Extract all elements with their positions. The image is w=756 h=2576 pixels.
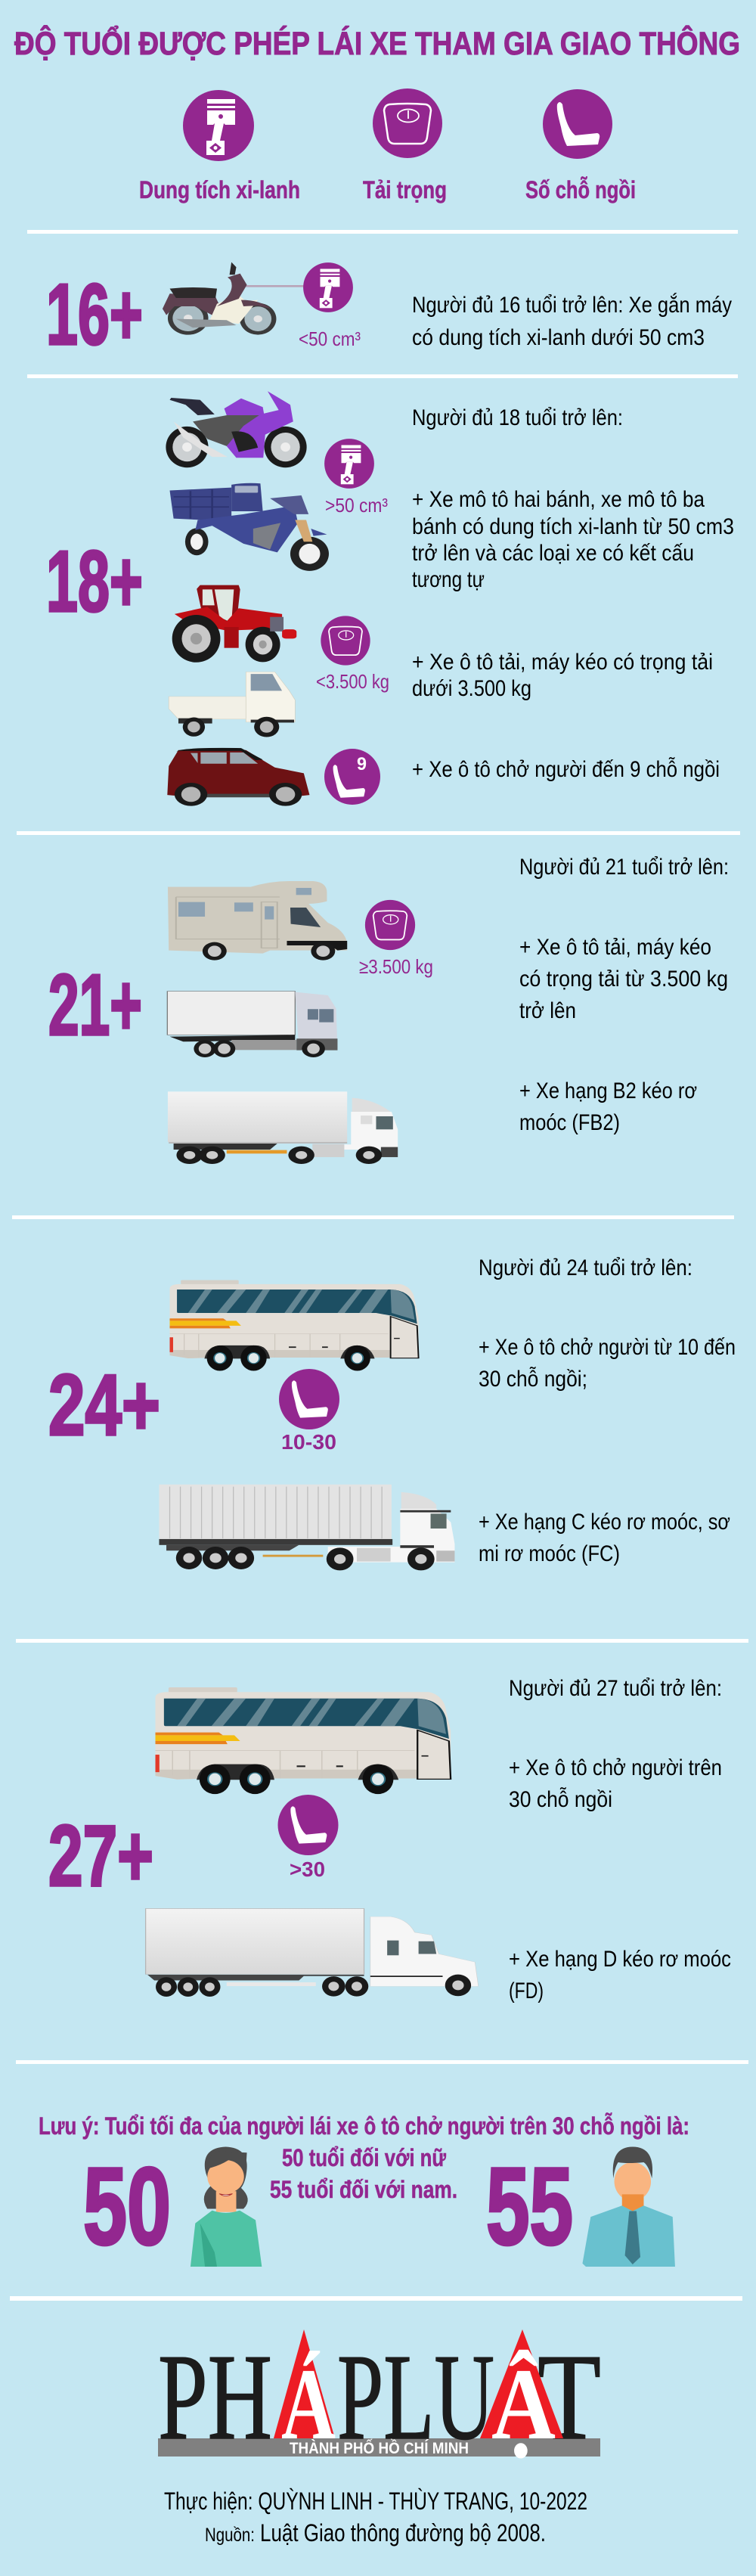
icon: sport motorcycle [166,391,307,467]
text: age 24 rules [479,1255,736,1566]
text: age 18 rules: tương tự [412,567,485,592]
age number 16+: 16+ [46,267,143,363]
icon: seat legend [543,89,612,159]
icon: large coach bus [156,1687,451,1794]
text: age 18 rules [412,405,734,782]
text: age 21 rules: + Xe hạng B2 kéo rơ [519,1079,697,1103]
logo: Pháp Luật [158,2329,601,2466]
number 50: 50 [83,2145,171,2267]
icon: coach bus [170,1280,419,1370]
icon: piston [324,439,374,489]
age number 18+: 18+ [46,534,143,630]
text: age 27 rules: + Xe ô tô chở người trên [509,1755,722,1780]
note line: women: 50 tuổi đối với nữ [282,2144,447,2171]
text: age 18 rules: dưới 3.500 kg [412,676,531,701]
logo letter A with red triangle: Ậ [491,2348,556,2461]
age number 21+: 21+ [48,957,142,1054]
icon: piston [303,262,353,312]
panel: age 27 [48,1676,731,2003]
logo letters PLU: PLU [337,2329,494,2466]
icon: container truck [159,1485,454,1570]
text: age 27 rules: Người đủ 27 tuổi trở lên: [509,1676,722,1701]
panel: age 21 [48,855,729,1164]
icon: box truck [167,992,337,1057]
panel: legend [139,88,636,203]
label: under 3500 kg: <3.500 kg [316,670,389,693]
icon: scale legend [373,88,442,158]
icon: woman [191,2147,262,2267]
text: age 18 rules: trở lên và các loại xe có kết cấu [412,541,694,566]
text: age 27 rules: (FD) [509,1979,544,2003]
legend label: cylinder: Dung tích xi-lanh [139,176,300,203]
legend label: seats: Số chỗ ngồi [525,176,636,203]
icon: mini truck [169,672,295,737]
text: age 21 rules: + Xe ô tô tải, máy kéo [519,935,711,960]
text: age 27 rules [509,1676,731,2003]
legend label: load: Tải trọng [363,176,447,203]
text: age 21 rules: moóc (FB2) [519,1110,620,1135]
text: age 24 rules: mi rơ moóc (FC) [479,1541,620,1566]
icon: piston legend [183,90,254,161]
icon: moped [163,262,304,335]
label: over 30 seats: >30 [290,1858,325,1881]
age number 27+: 27+ [48,1808,153,1904]
icon: passenger car [167,748,309,806]
label: at least 3500 kg: ≥3.500 kg [359,955,433,978]
panel: age 18 [46,391,734,806]
label: 10-30 seats: 10-30 [281,1430,336,1454]
icon: cargo tricycle [170,483,329,571]
logo letter A with red triangle [274,2329,336,2461]
logo letter A with red triangle: Á [281,2348,336,2461]
icon: seat [278,1795,339,1855]
icon: scale [321,616,370,666]
credits: Nguồn: [205,2525,255,2546]
logo letter T: T [538,2329,601,2466]
icon: long-nose trailer truck [146,1909,479,1997]
text: age 24 rules: 30 chỗ ngồi; [479,1367,587,1392]
text: age 16 rule [412,293,732,350]
icon: tractor [172,585,296,663]
number 55: 55 [486,2145,573,2267]
label: over 50 cm3: >50 cm³ [325,494,388,517]
age number 24+: 24+ [48,1358,160,1454]
credits [164,2488,587,2547]
panel: note on maximum age [39,2112,689,2267]
icon: seat [279,1369,339,1429]
icon: camper van [168,881,347,961]
text: age 24 rules: Người đủ 24 tuổi trở lên: [479,1255,692,1280]
text: age 27 rules: 30 chỗ ngồi [509,1787,612,1812]
text: age 16 rule: có dung tích xi-lanh dưới 50 cm3 [412,325,705,350]
text: age 18 rules: + Xe mô tô hai bánh, xe mô tô ba [412,487,705,512]
panel: age 24 [48,1255,736,1570]
note line: men: 55 tuổi đối với nam. [270,2176,457,2203]
text: age 18 rules: + Xe ô tô tải, máy kéo có trọng tải [412,650,713,675]
logo subtitle: THÀNH PHỐ HỒ CHÍ MINH [290,2439,469,2457]
logo grey band [158,2438,600,2457]
credits: Luật Giao thông đường bộ 2008. [260,2519,546,2547]
text: age 21 rules [519,855,729,1135]
logo letters PH: PH [158,2329,272,2466]
icon: man [582,2147,675,2267]
label: under 50 cm3: <50 cm³ [299,327,361,350]
credits: Thực hiện: QUỲNH LINH - THÙY TRANG, 10-2022 [164,2488,587,2515]
icon: seat 9 [324,749,380,805]
icon: scale [365,900,415,950]
text: age 18 rules: Người đủ 18 tuổi trở lên: [412,405,623,430]
icon: trailer truck [168,1091,398,1164]
text: age 21 rules: có trọng tải từ 3.500 kg [519,967,728,992]
icon: seat 9: 9 [357,754,367,774]
text: age 21 rules: trở lên [519,998,576,1023]
panel: age 16 [46,262,732,363]
